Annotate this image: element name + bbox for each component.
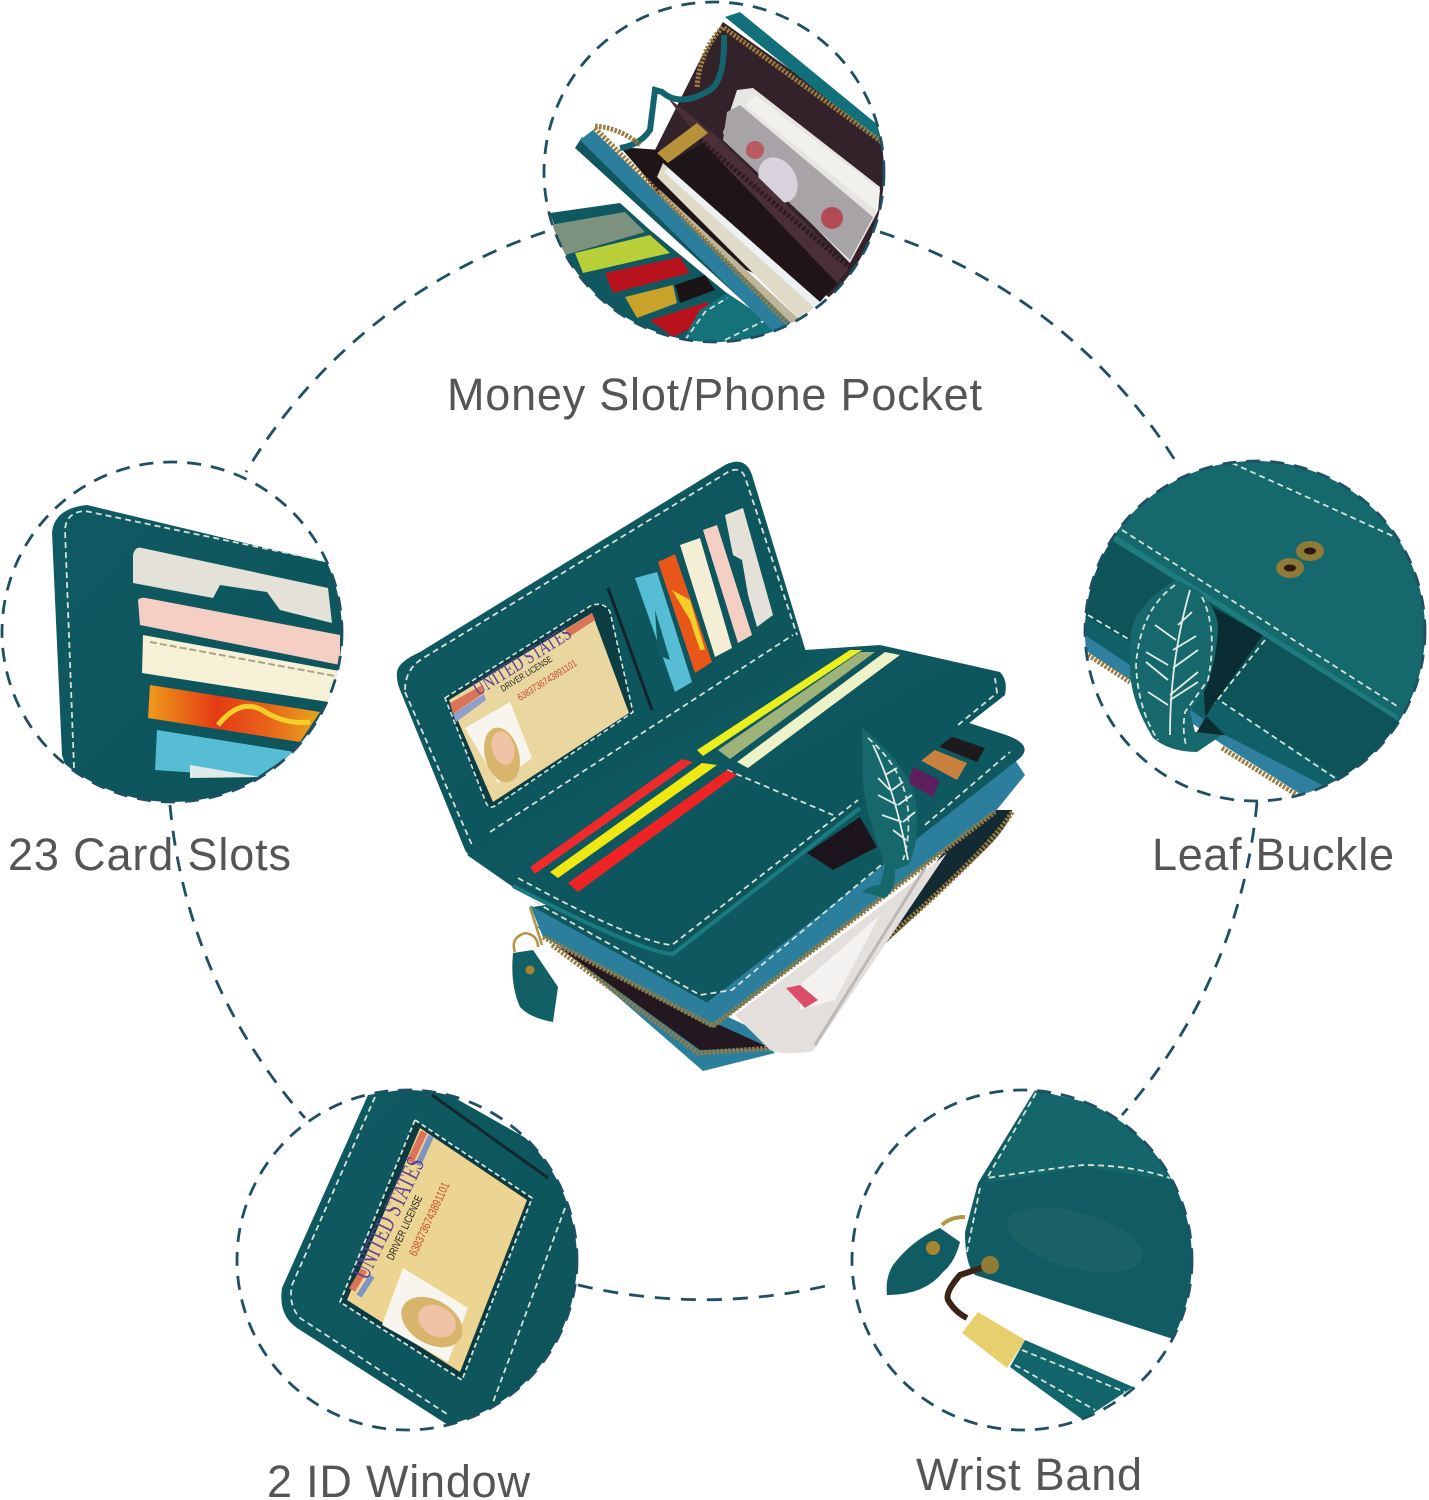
upper cards — [635, 572, 692, 692]
phone — [723, 88, 880, 263]
portrait — [382, 1268, 468, 1362]
left slot cards — [530, 759, 693, 874]
cards inside body — [940, 735, 985, 762]
lower half inner pouch — [555, 945, 770, 1050]
zip divider — [667, 97, 850, 283]
card slit — [608, 588, 652, 710]
license subtitle: DRIVER LICENSE — [385, 1194, 425, 1262]
circle: wrist band — [852, 1090, 1200, 1430]
leaf buckle — [862, 728, 917, 898]
dark inner pouch — [620, 143, 837, 302]
label: 23 card slots: 23 Card Slots — [8, 829, 291, 880]
ID window — [445, 604, 633, 807]
lower strip — [1085, 616, 1340, 788]
phone — [735, 853, 947, 1053]
middle panel and front flap — [467, 645, 1006, 955]
wrist strap — [1010, 1340, 1133, 1420]
snap buttons — [1296, 541, 1324, 561]
zipper pull — [512, 950, 558, 1022]
blue zip band — [1085, 638, 1310, 800]
circle: ID window — [237, 1085, 600, 1440]
portrait — [465, 702, 532, 783]
card: pink — [138, 598, 340, 665]
card: white — [133, 548, 332, 623]
dark gap — [1195, 600, 1263, 735]
card: blue — [155, 730, 295, 777]
central wallet — [397, 462, 1025, 1071]
inner wall trim — [620, 35, 724, 148]
right back shell — [820, 810, 1012, 1020]
circle: money slot and phone pocket — [544, 2, 886, 345]
right slot cards — [697, 650, 862, 756]
license subtitle: DRIVER LICENSE — [499, 654, 554, 694]
upper half blue band — [530, 760, 1025, 1028]
upper flap — [397, 462, 810, 855]
license card — [347, 1128, 527, 1372]
card panel — [550, 203, 790, 345]
zipper leaf pull — [887, 1228, 960, 1295]
pocket back panel — [655, 22, 886, 300]
upper zip — [543, 812, 995, 1026]
leaf tab — [1130, 580, 1222, 752]
label: money slot and phone pocket: Money Slot/Phone Pocket — [447, 369, 982, 420]
flap — [1116, 461, 1425, 720]
license number: 6383736743891101 — [516, 658, 580, 704]
card: cream — [142, 635, 345, 703]
lower half blue band — [535, 925, 775, 1071]
circle: leaf buckle — [1085, 455, 1429, 801]
window frame — [340, 1120, 532, 1380]
front zip band — [575, 137, 790, 335]
circle: 23 card slots — [2, 462, 345, 810]
lower zip — [552, 945, 772, 1053]
dashed connector ring — [170, 232, 1257, 1300]
main body — [533, 720, 1025, 1003]
gold clasp — [962, 1312, 1025, 1368]
wrist cord — [948, 1265, 990, 1318]
label: leaf buckle: Leaf Buckle — [1152, 829, 1394, 880]
gold zipper pull — [657, 123, 708, 163]
label: wrist band: Wrist Band — [916, 1449, 1142, 1500]
license heading: UNITED STATES — [469, 622, 576, 700]
license heading: UNITED STATES — [346, 1152, 430, 1284]
banknotes — [657, 163, 820, 320]
card: orange — [148, 685, 320, 742]
license number: 6383736743891101 — [406, 1180, 453, 1258]
